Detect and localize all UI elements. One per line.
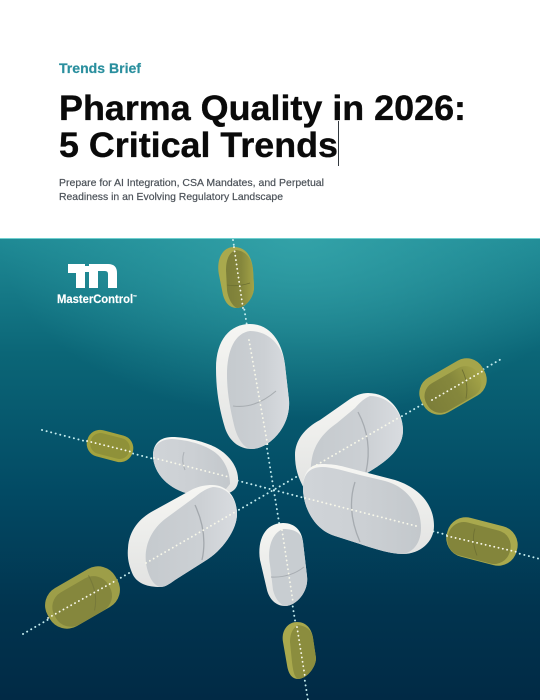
title: Pharma Quality in 2026: [59, 89, 466, 128]
pill: left white [153, 437, 238, 494]
icon: logo mark [68, 264, 117, 288]
dotted axis lines [23, 240, 540, 700]
pill: bottom olive [283, 622, 316, 679]
pill: top olive [218, 247, 254, 308]
pill: bottom left olive [38, 559, 127, 636]
pill: right white large [303, 464, 434, 554]
dotted lines over pills [48, 247, 517, 677]
pill: top large white [216, 324, 289, 449]
label: trends brief: Trends Brief [59, 60, 141, 76]
subtitle: Prepare for AI Integration, CSA Mandates, and Perpetual [59, 177, 324, 189]
logo: MasterControl [57, 264, 137, 306]
pill: bottom centre white [259, 523, 307, 606]
subtitle [59, 177, 324, 203]
wordmark: MasterControl [57, 294, 135, 306]
title: 5 Critical Trends [59, 126, 338, 165]
wordmark: ™ [133, 294, 137, 299]
hero background [0, 238, 540, 700]
pill: right upper olive [413, 352, 493, 421]
subtitle: Readiness in an Evolving Regulatory Landscape [59, 191, 283, 203]
text cursor [338, 121, 339, 166]
pill: right lower olive [442, 513, 522, 570]
pill: top right white [295, 393, 403, 490]
pill: left small olive [84, 427, 136, 465]
pill: bottom left white [128, 485, 237, 587]
title [59, 89, 466, 165]
